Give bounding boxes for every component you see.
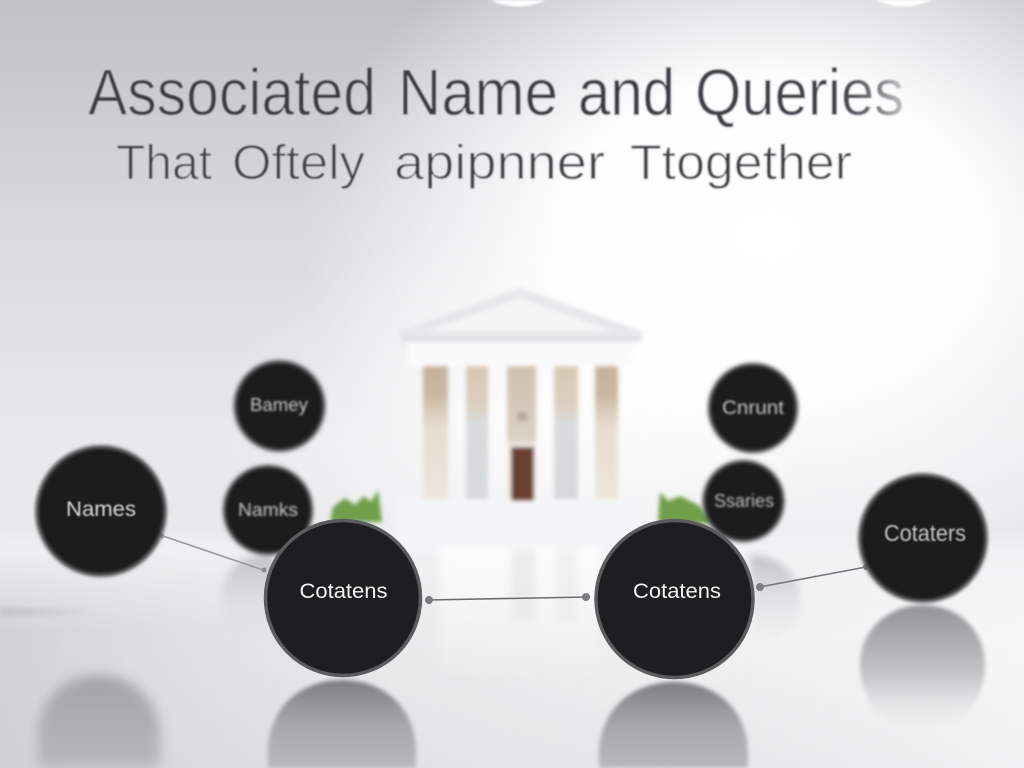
disc: Cotatens left	[266, 520, 420, 676]
title	[88, 55, 904, 190]
disc: Cotatens right	[596, 520, 753, 678]
disc: Cotaters right: Cotaters	[884, 520, 966, 546]
back disc: Cnrunt	[709, 364, 797, 452]
back disc: Namks: Namks	[238, 500, 298, 520]
disc: Cotaters right	[860, 474, 986, 602]
pediment	[398, 288, 644, 342]
back disc: Bamey: Bamey	[250, 395, 308, 415]
courthouse building	[398, 288, 644, 500]
bushes	[330, 490, 712, 524]
title: Name	[398, 55, 558, 129]
disc reflections	[38, 555, 985, 768]
title: That	[116, 136, 212, 190]
title: apipnner	[394, 136, 605, 190]
title: Ttogether	[630, 136, 852, 190]
disc: Names	[36, 446, 166, 576]
disc: Cotatens left: Cotatens	[300, 580, 388, 603]
title: Oftely	[232, 136, 366, 190]
disc: Cotatens right: Cotatens	[633, 580, 721, 603]
back disc: Bamey	[234, 361, 324, 451]
back disc: Ssaries	[704, 461, 784, 541]
back disc: Namks	[224, 466, 312, 554]
back disc: Cnrunt: Cnrunt	[722, 398, 785, 419]
door	[511, 447, 534, 500]
courthouse steps	[396, 496, 650, 552]
disc: Names: Names	[66, 498, 136, 521]
back disc: Ssaries: Ssaries	[714, 491, 774, 511]
title: and	[578, 55, 675, 129]
ceiling lights	[490, 0, 932, 6]
floor	[0, 530, 1024, 768]
connector lines	[160, 534, 869, 604]
title: Associated	[88, 55, 376, 129]
entablature	[408, 342, 632, 366]
building reflection	[440, 548, 600, 678]
column gaps	[423, 366, 618, 499]
title: Queries	[695, 55, 904, 129]
